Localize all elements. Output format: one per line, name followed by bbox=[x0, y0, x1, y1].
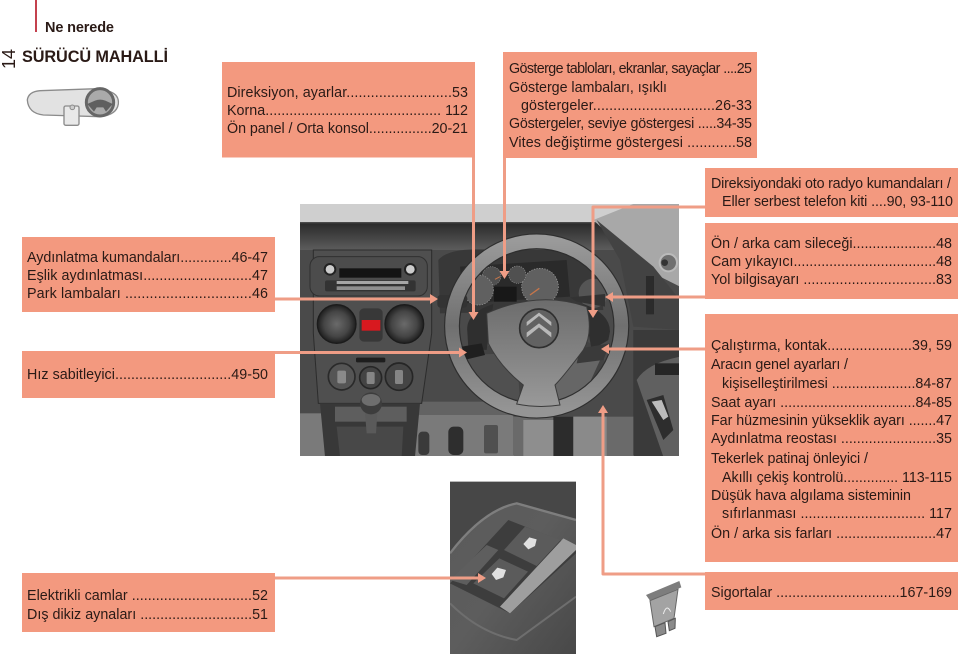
icon: fuse bbox=[646, 581, 681, 637]
callout: radio controls: Eller serbest telefon kiti ....90, 93-110 bbox=[722, 194, 953, 210]
callout: wipers: Ön / arka cam sileceği.....................48 bbox=[711, 234, 952, 252]
callout: lighting controls bbox=[22, 237, 275, 312]
icon: dashboard with steering wheel bbox=[27, 89, 118, 125]
windscreen band bbox=[300, 204, 633, 222]
callout: instruments: Göstergeler, seviye göstergesi .....34-35 bbox=[509, 116, 752, 132]
callout: ignition and settings: Tekerlek patinaj önleyici / bbox=[711, 451, 868, 467]
callout: steering and panel: Korna............................................ 112 bbox=[227, 103, 468, 119]
heading: driver's area: SÜRÜCÜ MAHALLİ bbox=[22, 47, 168, 66]
dashboard body bbox=[300, 204, 680, 457]
steering wheel bbox=[452, 241, 621, 411]
instrument cluster bbox=[437, 249, 608, 313]
callout: instruments: Vites değiştirme göstergesi ............58 bbox=[509, 135, 752, 151]
callout: ignition and settings: Saat ayarı ..................................84-85 bbox=[711, 395, 952, 411]
stalks bbox=[437, 295, 467, 308]
callout: steering and panel: Ön panel / Orta konsol................20-21 bbox=[227, 119, 468, 137]
callout: wipers bbox=[705, 223, 958, 299]
panel: window switch photo bbox=[450, 482, 576, 654]
page section label: Ne nerede bbox=[35, 0, 114, 36]
callout: instruments: Gösterge tabloları, ekranlar, sayaçlar ....25 bbox=[509, 61, 752, 77]
callout: cruise control: Hız sabitleyici.............................49-50 bbox=[27, 367, 268, 383]
callout: instruments bbox=[503, 52, 757, 158]
callout: cruise control bbox=[22, 351, 275, 398]
callout: lighting controls: Eşlik aydınlatması...........................47 bbox=[27, 268, 268, 284]
callout: ignition and settings: kişiselleştirilmesi .....................84-87 bbox=[722, 376, 952, 392]
callout: fuses: Sigortalar ...............................167-169 bbox=[711, 585, 952, 601]
callout: ignition and settings: Aydınlatma reostası ........................35 bbox=[711, 431, 952, 447]
callout: steering and panel bbox=[222, 62, 475, 158]
callout: windows and mirrors: Elektrikli camlar ..............................52 bbox=[27, 588, 268, 604]
callout: windows and mirrors bbox=[22, 573, 275, 632]
callout: ignition and settings: Aracın genel ayarları / bbox=[711, 357, 848, 373]
callout: radio controls bbox=[705, 168, 958, 217]
connector lines and arrows bbox=[273, 155, 707, 583]
callout: instruments: Gösterge lambaları, ışıklı bbox=[509, 80, 667, 96]
gear lever and console bbox=[320, 392, 498, 457]
centre console bbox=[310, 250, 432, 403]
panel: steering wheel and dashboard photo bbox=[300, 204, 680, 457]
callout: windows and mirrors: Dış dikiz aynaları ............................51 bbox=[27, 607, 268, 623]
callout: ignition and settings: Ön / arka sis farları .........................47 bbox=[711, 524, 952, 542]
callout: ignition and settings: Akıllı çekiş kontrolü.............. 113-115 bbox=[722, 470, 952, 486]
callout: ignition and settings: Düşük hava algılama sisteminin bbox=[711, 488, 911, 504]
callout: fuses bbox=[705, 572, 958, 610]
callout: instruments: göstergeler..............................26-33 bbox=[521, 98, 752, 114]
callout: lighting controls: Park lambaları ...............................46 bbox=[27, 286, 268, 302]
callout: ignition and settings: Çalıştırma, kontak.....................39, 59 bbox=[711, 338, 952, 354]
callout: steering and panel: Direksiyon, ayarlar..........................53 bbox=[227, 85, 468, 101]
callout: wipers: Cam yıkayıcı....................................48 bbox=[711, 254, 952, 270]
callout: radio controls: Direksiyondaki oto radyo kumandaları / bbox=[711, 176, 951, 192]
page section label: Ne nerede: Ne nerede bbox=[45, 20, 114, 36]
callout: wipers: Yol bilgisayarı .................................83 bbox=[711, 272, 952, 288]
callout: ignition and settings: Far hüzmesinin yükseklik ayarı .......47 bbox=[711, 413, 952, 429]
callout: lighting controls: Aydınlatma kumandaları.............46-47 bbox=[27, 250, 268, 266]
callout: ignition and settings: sıfırlanması ............................... 117 bbox=[722, 506, 952, 522]
callout: ignition and settings bbox=[705, 314, 958, 562]
